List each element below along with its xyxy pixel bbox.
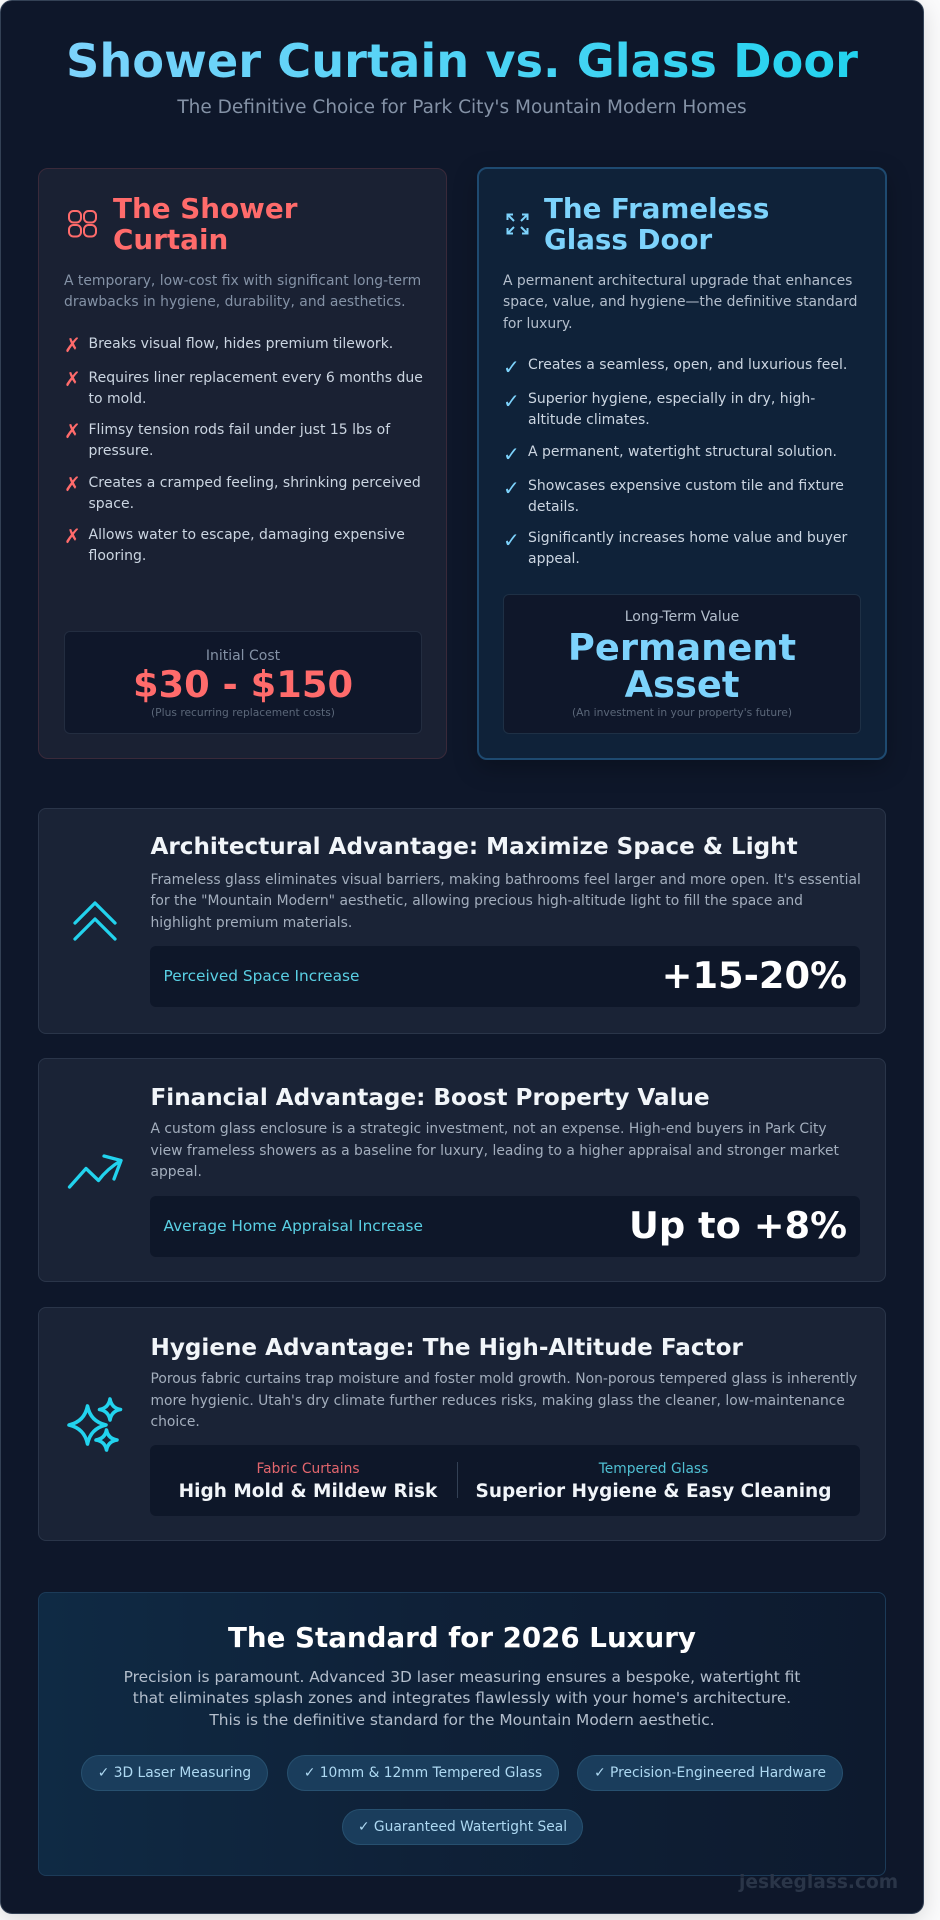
text: hygiene description: Porous fabric curtains trap moisture and foster mold growth. Non-porous tempered glass is inherently: [150, 1371, 857, 1387]
text: financial description: [150, 1121, 839, 1180]
list: glass door benefits: Superior hygiene, especially in dry, high-: [528, 390, 815, 406]
heading: architectural advantage: Architectural Advantage: Maximize Space & Light: [150, 834, 798, 860]
heading: the frameless glass door: [544, 192, 769, 256]
label: long-term value: Long-Term Value: [625, 609, 739, 625]
subtitle: The Definitive Choice for Park City's Mountain Modern Homes: [177, 96, 747, 118]
heading: standard: The Standard for 2026 Luxury: [228, 1620, 696, 1654]
text: financial description: appeal.: [150, 1164, 202, 1180]
list: glass door benefits: A permanent, watertight structural solution.: [528, 444, 837, 460]
metric label: appraisal increase: Average Home Appraisal Increase: [164, 1217, 423, 1235]
metric box: appraisal: [150, 1196, 860, 1257]
list: shower curtain drawbacks: [64, 333, 423, 564]
value: cost range: $30 - $150: [133, 663, 353, 706]
text: shower curtain description: A temporary, low-cost fix with significant long-term: [64, 273, 421, 289]
text: architectural description: highlight premium materials.: [150, 914, 352, 930]
text: shower curtain description: drawbacks in hygiene, durability, and aesthetics.: [64, 294, 406, 310]
value: permanent asset: Asset: [625, 663, 739, 706]
metric value: +15-20%: +15-20%: [662, 954, 847, 997]
tag: watertight seal: [342, 1809, 583, 1845]
watermark: jeskeglass.com: [739, 1872, 898, 1893]
list: shower curtain drawbacks: space.: [88, 496, 134, 512]
panel: frameless glass door: [477, 167, 887, 760]
comparison: fabric curtains: [179, 1461, 438, 1502]
text: hygiene description: choice.: [150, 1414, 200, 1430]
tag: hardware: [577, 1755, 843, 1791]
stat box: long-term value: [503, 594, 861, 734]
list: shower curtain drawbacks: pressure.: [88, 443, 153, 459]
comparison box: fabric vs glass: [150, 1445, 860, 1516]
text: hygiene description: more hygienic. Utah's dry climate further reduces risks, making glass the cleaner, low-maintenance: [150, 1392, 845, 1408]
list: glass door benefits: Creates a seamless, open, and luxurious feel.: [528, 357, 847, 373]
text: standard description: Precision is paramount. Advanced 3D laser measuring ensures a bespoke, watertight fit: [124, 1668, 800, 1686]
text: hygiene description: [150, 1371, 857, 1430]
panel: the standard for 2026 luxury: [38, 1592, 886, 1876]
text: glass door description: for luxury.: [503, 316, 573, 332]
list: shower curtain drawbacks: ✗: [64, 333, 81, 357]
list: glass door benefits: appeal.: [528, 551, 580, 567]
comparison: tempered glass: Tempered Glass: [599, 1461, 708, 1477]
heading: the shower curtain: Curtain: [113, 223, 228, 256]
tag: 3D laser measuring: ✓ 3D Laser Measuring: [98, 1765, 251, 1781]
note: investment: (An investment in your property's future): [572, 706, 792, 718]
tag: 3D laser measuring: [81, 1755, 268, 1791]
icon: sparkles: [67, 1397, 122, 1452]
metric box: perceived space: [150, 946, 860, 1007]
tag: tempered glass: ✓ 10mm & 12mm Tempered Glass: [304, 1765, 542, 1781]
heading: the frameless glass door: Glass Door: [544, 223, 712, 256]
list: shower curtain drawbacks: flooring.: [88, 548, 146, 564]
icon: expand arrows: [506, 214, 528, 234]
comparison: tempered glass: Superior Hygiene & Easy Cleaning: [476, 1481, 831, 1502]
value: permanent asset: [568, 626, 796, 706]
list: shower curtain drawbacks: Flimsy tension rods fail under just 15 lbs of: [88, 422, 390, 438]
value: permanent asset: Permanent: [568, 626, 796, 669]
list: shower curtain drawbacks: ✗: [64, 472, 81, 496]
text: standard description: [124, 1668, 800, 1728]
tag: hardware: ✓ Precision-Engineered Hardware: [594, 1765, 826, 1781]
heading: the shower curtain: The Shower: [113, 192, 297, 225]
text: architectural description: [150, 872, 861, 930]
list: glass door benefits: ✓: [503, 355, 520, 379]
text: architectural description: Frameless glass eliminates visual barriers, making bathrooms feel larger and more open. It's essential: [150, 872, 861, 888]
label: initial cost: Initial Cost: [206, 648, 280, 664]
list: glass door benefits: ✓: [503, 476, 520, 500]
text: glass door description: A permanent architectural upgrade that enhances: [503, 273, 852, 289]
icon: double chevron up: [73, 901, 117, 941]
list: glass door benefits: details.: [528, 499, 579, 515]
tag: watertight seal: ✓ Guaranteed Watertight Seal: [358, 1819, 567, 1835]
text: architectural description: for the "Mountain Modern" aesthetic, allowing precious high-altitude light to fill the space and: [150, 893, 803, 909]
card: architectural advantage: [38, 808, 886, 1034]
comparison: tempered glass: [476, 1461, 831, 1502]
tag: tempered glass: [287, 1755, 559, 1791]
list: glass door benefits: Significantly increases home value and buyer: [528, 530, 847, 546]
text: shower curtain description: [64, 273, 421, 310]
list: glass door benefits: altitude climates.: [528, 412, 650, 428]
comparison: fabric curtains: High Mold & Mildew Risk: [179, 1481, 437, 1502]
text: standard description: that eliminates splash zones and integrates flawlessly with your home's architecture.: [133, 1689, 791, 1707]
heading: the frameless glass door: The Frameless: [544, 192, 769, 225]
icon: curtain grid: [68, 210, 97, 238]
text: financial description: A custom glass enclosure is a strategic investment, not an expense. High-end buyers in Park City: [150, 1121, 827, 1137]
list: glass door benefits: ✓: [503, 442, 520, 466]
list: shower curtain drawbacks: Allows water to escape, damaging expensive: [88, 527, 405, 543]
list: shower curtain drawbacks: to mold.: [88, 391, 146, 407]
comparison divider: [457, 1462, 458, 1498]
title: Shower Curtain vs. Glass Door: [66, 34, 858, 88]
icon: trending up: [68, 1154, 123, 1189]
list: glass door benefits: [503, 355, 848, 567]
list: shower curtain drawbacks: ✗: [64, 524, 81, 548]
stat box: initial cost: [64, 631, 422, 734]
list: glass door benefits: ✓: [503, 388, 520, 412]
metric label: perceived space increase: Perceived Space Increase: [164, 967, 359, 985]
heading: hygiene advantage: Hygiene Advantage: The High-Altitude Factor: [150, 1334, 743, 1360]
list: shower curtain drawbacks: Breaks visual flow, hides premium tilework.: [88, 336, 393, 352]
text: glass door description: [503, 273, 857, 332]
list: shower curtain drawbacks: ✗: [64, 366, 81, 390]
card: hygiene advantage: [38, 1307, 886, 1541]
list: glass door benefits: ✓: [503, 528, 520, 552]
text: glass door description: space, value, and hygiene—the definitive standard: [503, 294, 857, 310]
list: shower curtain drawbacks: ✗: [64, 419, 81, 443]
note: replacement costs: (Plus recurring replacement costs): [151, 706, 335, 718]
heading: the shower curtain: [113, 192, 298, 256]
list: shower curtain drawbacks: Requires liner replacement every 6 months due: [88, 370, 423, 386]
metric value: up to +8%: Up to +8%: [629, 1204, 847, 1247]
heading: financial advantage: Financial Advantage: Boost Property Value: [150, 1084, 710, 1110]
card: financial advantage: [38, 1058, 886, 1282]
text: financial description: view frameless showers as a baseline for luxury, leading to a higher appraisal and stronger market: [150, 1142, 839, 1158]
list: shower curtain drawbacks: Creates a cramped feeling, shrinking perceived: [88, 474, 421, 490]
panel: shower curtain: [38, 168, 447, 759]
text: standard description: This is the definitive standard for the Mountain Modern aesthetic.: [209, 1710, 715, 1728]
comparison: fabric curtains: Fabric Curtains: [256, 1461, 360, 1477]
list: glass door benefits: Showcases expensive custom tile and fixture: [528, 478, 844, 494]
